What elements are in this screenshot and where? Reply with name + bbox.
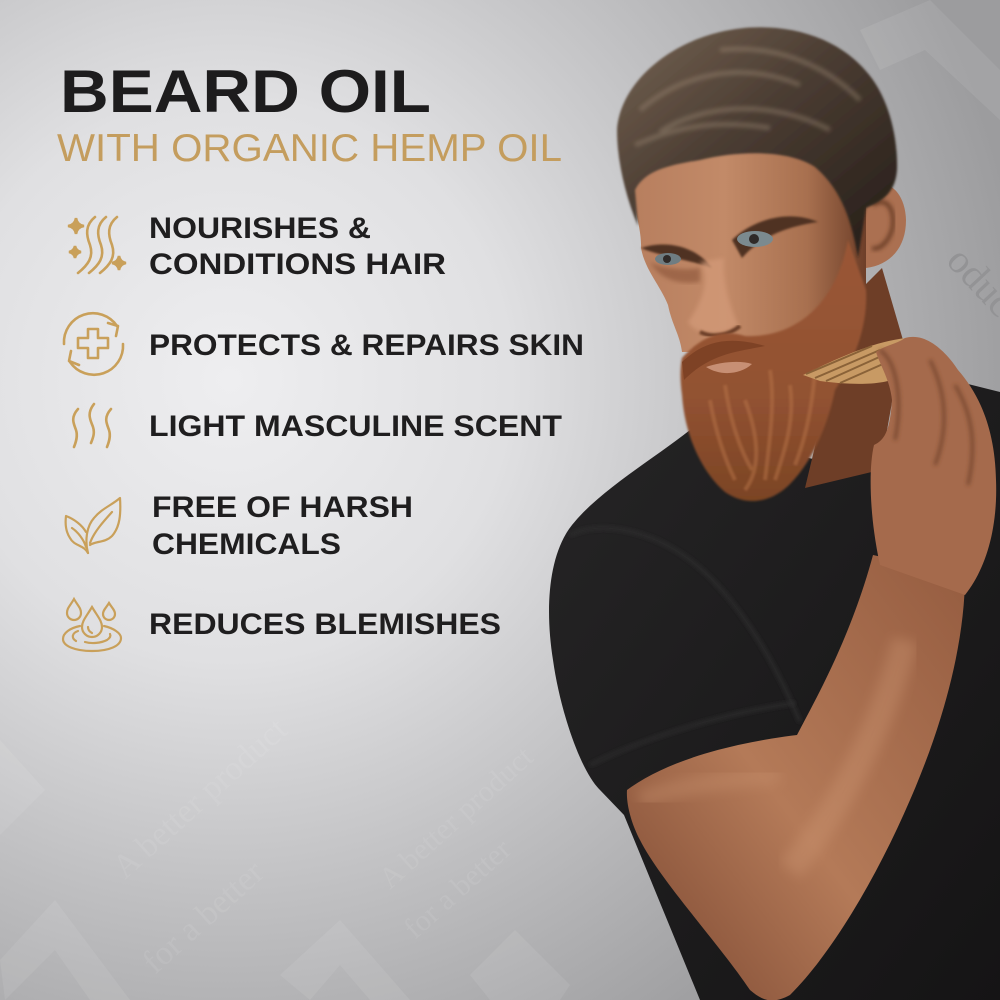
label: LIGHT MASCULINE SCENT — [149, 410, 562, 443]
arm — [627, 555, 965, 1000]
label: NOURISHES & — [149, 212, 371, 245]
nose — [688, 258, 738, 333]
icon: plus in circular arrows — [64, 313, 123, 375]
title — [57, 58, 562, 170]
icon: scent waves — [73, 404, 111, 447]
benefit: light masculine scent — [73, 404, 562, 447]
label: FREE OF HARSH — [152, 491, 413, 524]
photo: bearded man with comb — [549, 27, 1000, 1000]
benefit: nourishes and conditions hair: CONDITIONS HAIR — [149, 248, 446, 281]
icon: hair waves with sparkles — [68, 217, 126, 273]
benefit: free of harsh chemicals — [66, 491, 413, 561]
shirt — [549, 384, 1000, 1000]
hair — [617, 27, 897, 258]
icon: oil drops and ripples — [63, 599, 121, 651]
comb — [803, 338, 906, 384]
benefit: nourishes and conditions hair — [68, 212, 446, 281]
ear — [860, 183, 906, 268]
icon: leaves — [66, 498, 120, 553]
face — [630, 130, 866, 352]
watermark pattern: A better product — [373, 740, 540, 895]
title: BEARD OIL — [60, 58, 431, 125]
watermark pattern: for a better — [136, 853, 272, 981]
beard — [680, 240, 866, 501]
benefit: reduces blemishes — [63, 599, 501, 651]
neck — [805, 268, 903, 488]
benefit: protects and repairs skin — [64, 313, 584, 375]
subtitle: WITH ORGANIC HEMP OIL — [57, 127, 562, 170]
watermark pattern: for a better — [398, 833, 517, 945]
benefit: free of harsh chemicals: CHEMICALS — [152, 528, 341, 561]
label: REDUCES BLEMISHES — [149, 608, 501, 641]
hand — [871, 337, 996, 595]
label: PROTECTS & REPAIRS SKIN — [149, 329, 584, 362]
watermark pattern: A better product — [106, 710, 295, 886]
